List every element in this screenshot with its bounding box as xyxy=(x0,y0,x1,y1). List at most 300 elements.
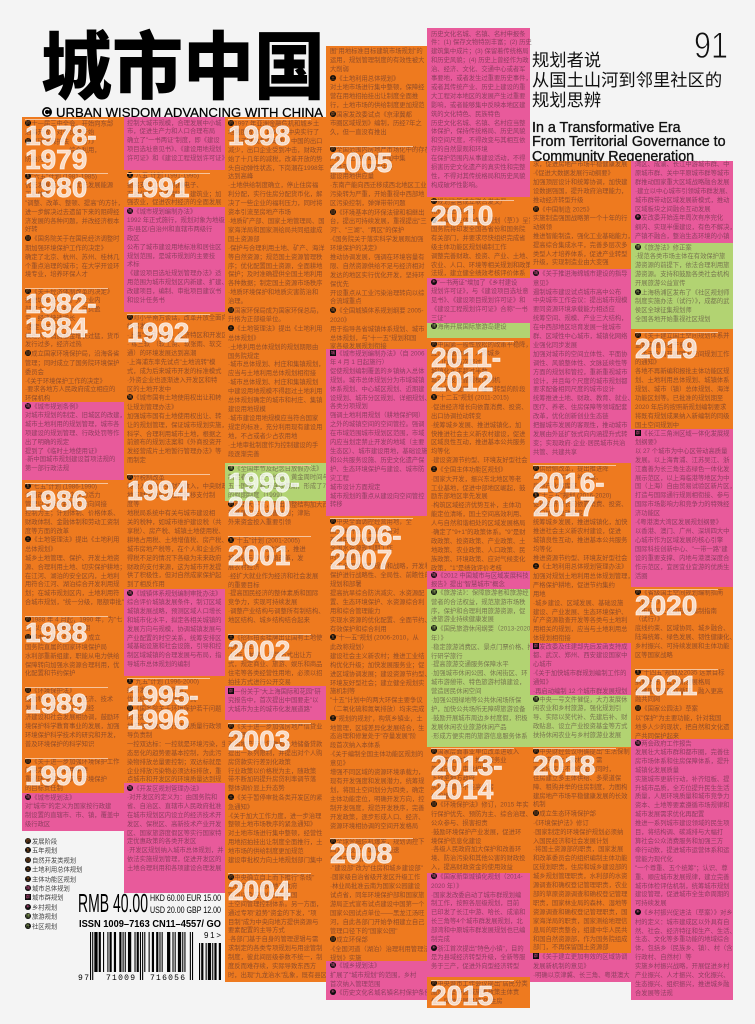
text: 2005 events: 2020》 xyxy=(330,317,350,324)
text: 1982-1984 events: 发行过多，经济过热 xyxy=(25,341,82,348)
text: 土地利用总体规划: 对土地市场进行集中整顿，保障经 xyxy=(330,84,424,91)
price: HKD EUR: HKD 60.00 EUR 15.00 xyxy=(150,893,221,904)
text: 一书两证: 确立了"一书两证"制度，即《建设 xyxy=(127,137,220,144)
text: 两会与乡村振兴促进法: 城市体检评估机制，统筹城市规划 xyxy=(635,882,729,890)
text: 2020 events: 《市级国土空间规划编制指南 xyxy=(635,608,717,614)
panel: 国家新型城镇化规划 xyxy=(427,873,530,977)
text: 两会与乡村振兴促进法: 建设管理，促进城市全生命周期的 xyxy=(635,891,729,898)
text: 2006-2007 events: 提高抗旱综合防洪减灾、水资源配 xyxy=(330,590,424,597)
text: 2016-2017 events: 体规划相衔接 xyxy=(533,635,571,642)
text: 2016-2017 events: 推进资源节约型、环境友好型社会 xyxy=(533,555,627,562)
text: 两会与乡村振兴促进法: 村的定义：城市建成区以外具有自 xyxy=(635,919,729,926)
text: 1990 events: 重视环境保护，实行环境保护 xyxy=(25,776,107,783)
text: 两会与乡村振兴促进法: 目，将结构调、碳减排与大幅打 xyxy=(635,829,723,836)
text: 2008 events: ·国家级自治省级开发区升级工作 xyxy=(330,874,420,881)
year label: 1996 xyxy=(127,704,189,735)
text: 海绵城市: 城 xyxy=(534,270,538,275)
panel: 旅游法 xyxy=(427,589,530,747)
text: 2002 events xyxy=(228,634,322,686)
text: 中央一号文件 xyxy=(533,696,631,741)
text: 2008 events: 国家公园试点单位——黑龙江汤旺 xyxy=(330,910,424,917)
text: 开发区规划管理办法: 在城市规划区内设立的经济技术开 xyxy=(127,812,221,819)
text: 2021 events xyxy=(635,669,733,741)
text: 2006-2007 events: 国土地开发，企业投资对 xyxy=(330,528,399,535)
legend: 主体功能区规划 xyxy=(32,876,76,883)
text: 大上海国际和花园 xyxy=(228,688,321,713)
text: 区域协调发展新机制 xyxy=(533,953,631,980)
legend: 主 xyxy=(26,876,30,881)
text: 2010 events: 国务院将印发全国各省份和国务院 xyxy=(431,226,525,233)
text: 区域协调发展新机制: 群 xyxy=(534,953,538,958)
text: 1998 events: 自 xyxy=(229,307,233,312)
year label: 1982- xyxy=(25,288,97,319)
legend: 发展阶段 xyxy=(32,838,57,846)
text: 一书三证: 《建设工程规划许可证》合称"一书 xyxy=(431,306,528,313)
text: 开发区规划管理办法: 《开发区规划管理办法》 xyxy=(133,785,203,792)
text: 两会与乡村振兴促进法: 城 xyxy=(636,740,640,744)
text: 城市规划编制办法: 城 xyxy=(128,208,132,212)
heading: English feature title xyxy=(532,120,726,165)
text: 2021 events: 五 xyxy=(636,669,640,674)
text: 2018 events: 源调查和确权登记管理职责，农业 xyxy=(533,882,627,889)
text: 2011-2012 events: 中国第一般性放松的政策平稳降， xyxy=(437,341,532,348)
text: 城乡规划法: 城 xyxy=(331,962,335,967)
text: 两会与乡村振兴促进法: 可持续发展 xyxy=(635,900,666,907)
text: 2001 events: 竞争力，实现可持续发展 xyxy=(228,599,297,606)
text: 土地利用总体规划: 运用，规划管理制度的有效性被大 xyxy=(330,57,424,64)
text: 历史文化名城: 治、经济、文化、交通中心或者军 xyxy=(431,66,525,73)
text: 2016-2017 events: 促进经济增长向依靠消费、投资、 xyxy=(533,501,627,508)
text: 2010 events: 级主体功能区规划编制工作 xyxy=(431,244,507,251)
text: 旅游法修正案与社区规划: 游资源的前提下，依法合理利用旅 xyxy=(635,262,729,269)
text: 两会与乡村振兴促进法: 产业振兴、人才振兴、文化振兴、 xyxy=(635,972,729,979)
text: 2003 events: 提出一系列限制，并提出对个人购 xyxy=(228,750,322,757)
text: 2016-2017 events: 阶 xyxy=(534,464,538,470)
text: 1992 events: 区的土地开发中 xyxy=(127,386,171,393)
text: 2013-2014 events: 入，提高财政资金的使用效益 xyxy=(431,864,513,871)
text: 2016-2017 events: 统筹城乡发展，推进城镇化，加快 xyxy=(533,519,627,526)
text: 1991 events: 强农业，促进农村经济的全面发展 xyxy=(127,199,221,206)
text: 2011-2012 events: "十二五"规划 (2011-2015) xyxy=(437,395,509,402)
text: 1986 events: 全面改革，增强企业的活力 xyxy=(25,492,101,499)
text: 2018 events: 住房建立多主体供给、多渠道保 xyxy=(533,775,621,782)
panel: 开发区规划管理办法 xyxy=(124,783,225,893)
text: 2005 events: 自 xyxy=(331,209,335,214)
text: 城市群与特色小镇: 乡 xyxy=(636,214,640,219)
text: 城市规划编制办法: 《城市规划编制办法》 xyxy=(133,208,196,215)
text: 1982-1984 events: 部权力，放开物价、自负盈 xyxy=(25,306,101,313)
text: 2008 events: 游局正式宣布试点建设中国第一个 xyxy=(330,901,424,908)
text: 2011-2012 events: 制改革为发展人，建设转型的阶段 xyxy=(431,386,525,393)
text: 1998 events: 总体规划》 xyxy=(228,335,259,342)
text: 1990 events: 自 xyxy=(26,758,30,763)
text: 2013-2014 events: 房地产调控不能高估房 xyxy=(431,784,494,791)
text: 2011-2012 events: 政策，"1"是绩效评价考核 xyxy=(431,565,502,572)
text: 海绵城市 xyxy=(533,270,631,458)
text: 2016-2017 events: 《土地利用总体规划管理办法》 xyxy=(539,564,627,571)
text: 一书三证: 三证" xyxy=(431,315,446,322)
text: 旅游法修正案与社区规划: 全国各地开始重视社区规划 xyxy=(635,316,711,323)
text: 城市群与特色小镇: 湾区、成渝、长江中游城市群、中 xyxy=(635,161,729,168)
text: 2018 events: 息局的职责整合，组建中华人民共 xyxy=(533,927,627,934)
text: 大数据与中国制造: 动纲领 xyxy=(533,224,552,231)
text: 城市群与特色小镇: 城市群带动区域发展新模式，推动 xyxy=(635,197,729,204)
year label: 1998 xyxy=(228,120,290,151)
text: 一书两证: 项目选址意见书》、《建设用地规划 xyxy=(127,146,221,153)
text: 1988 events xyxy=(25,616,122,677)
text: 2003 events: 整体调价显上升态势 xyxy=(228,785,285,792)
text: 1992 events: ·上海"浦东"开发，经济特区和开发区 xyxy=(127,332,228,339)
text: 1980 events: 期加强环境保护工作的决定》 xyxy=(25,245,107,252)
text: 2004 events: 中央确立自上而下推行"条线" xyxy=(234,874,314,881)
text: 城市规划法 xyxy=(25,794,119,828)
text: 2001 events: ·提高国民经济的整体素质和国际 xyxy=(228,590,318,597)
text: 2011-2012 events: 快推进社会主义新农村建设，促进 xyxy=(431,431,525,438)
panel: 国家中心城市 xyxy=(530,643,631,695)
year label xyxy=(127,680,199,735)
text: 2011-2012 events: ·建设资源节约型、环境友好型社会 xyxy=(431,457,528,464)
text: 城市规划编制办法: 市/县区/自治州和直辖市两级行 xyxy=(127,226,212,233)
text: 土地利用总体规划: 图"用地标准目标建筑市场规划"的 xyxy=(330,48,423,55)
text: 2011-2012 events: 阶 xyxy=(432,340,436,346)
text: 1994 events xyxy=(127,474,234,588)
text: 2013-2014 events: ·各级人民政府加大保护和改善环 xyxy=(431,846,521,853)
text: 城市规划条例: 城 xyxy=(26,402,30,408)
text: 1988 events: 保障转向加强水资源合理利用，优 xyxy=(25,662,119,669)
text: 两会与乡村振兴促进法: 推进一系列城市建设领域的民生项 xyxy=(635,820,729,827)
text: 2005 events: 推动协调发展，强调在环境容量有 xyxy=(330,254,424,261)
panel: 长三角与粤港澳 xyxy=(631,429,733,587)
text: 2013-2014 events: 境、防治污染和其他公害的财政投 xyxy=(431,855,525,862)
text: 旅游法修正案与社区规划: 侯区全球征集规划师 xyxy=(635,307,692,314)
text: 1992 events: 前颁布的规划法案和《外商投资开 xyxy=(127,439,221,446)
text: 1994 events: 将收入划分中央财政收入，中央财政对 xyxy=(127,483,234,490)
text: 城镇体系规划编制审批办法: 综合评价城镇发展条件，制订区域 xyxy=(127,599,221,606)
text: 2008 events: 试点省，同年环境保护部和国家旅 xyxy=(330,892,424,899)
text: 海绵城市: 统筹推进土地、财政、教育、就业、 xyxy=(533,395,634,402)
text: 城镇体系规划编制审批办法 xyxy=(127,590,222,668)
text: 长三角与粤港澳: 以 27 个城市为中心区带动高质量 xyxy=(635,448,727,455)
text: 1980 events: 好转 xyxy=(25,226,38,233)
legend: 五年规划 xyxy=(32,848,57,855)
text: 1998 events: 始了十几年的减税，改革开放的势 xyxy=(228,156,322,163)
text: 2008 events: ·《全国河道（湖泊）治理利用管理法 xyxy=(330,946,430,953)
text: 1991 events: 振兴支柱工业、机械电子、 xyxy=(127,182,203,189)
text: 城市规划编制办法: 1992 年正式施行，规划对象为地级 xyxy=(127,217,225,224)
text: 2018 events: 中央财经会议明确提出"生活保制 xyxy=(539,748,630,755)
text: 历史文化名城 xyxy=(431,30,532,189)
legend: 五 xyxy=(26,847,30,852)
text: 两会与乡村振兴促进法: 行政村、自然村）等 xyxy=(635,954,692,961)
text: 1986 events: 五 xyxy=(26,482,30,488)
text: 2005 events: 环境保护的决定》 xyxy=(330,245,380,252)
text: 两会与乡村振兴促进法: 算社会公众消费服务和加强三方 xyxy=(635,838,723,845)
text: 海南国际旅游岛: 海南开展国际旅游岛建设 xyxy=(437,324,507,331)
text: 一书三证: 见书》、《建设项目规划许可证》和 xyxy=(431,297,525,304)
legend: 群 xyxy=(26,894,30,899)
text: 2006-2007 events: 新增用地严格把控 xyxy=(330,536,380,544)
text: 城市规划编制办法 2006: 规划。城市总体规划分为市域城镇 xyxy=(330,377,424,384)
text: 中央一号文件: 扶持休闲农业与乡村旅游业发展 xyxy=(533,732,621,739)
text: 开发区规划管理办法: ·开发区规划纳入城市总体规划，并 xyxy=(127,847,224,854)
text: 历史文化名城: 历史文化名城、名镇、名村申报条 xyxy=(431,30,525,38)
text: 旅游法: 行研学旅行 xyxy=(431,653,462,660)
text: 2001 events: 的重要目标 xyxy=(228,582,259,589)
text: 国家中心城市: 群 xyxy=(534,643,538,648)
text: 城市规划编制办法 2006: 和公共服务设施、历史文化遗产保 xyxy=(330,457,424,464)
text: 2010 events: 农业、人口、环境等相关规划和政策 xyxy=(431,262,532,269)
text: 一书三证: 乡 xyxy=(432,279,436,284)
text: 城市规划编制办法: 《建设项目选址规划管理办法》适 xyxy=(127,270,221,277)
text: 城市群与特色小镇: 区域板块之间融合互动发展 xyxy=(635,206,711,213)
text: 2016-2017 events: 推进社会主义新农村建设，促进 xyxy=(533,528,621,535)
text: 1998 events: 国家环保局成为国家环保总局， xyxy=(234,308,322,315)
text: 城市规划编制办法 2006: 生态区）、城市建设用地，基础设施 xyxy=(330,448,428,455)
text: 长三角与粤港澳: 心城市作为区域发展的核心引擎 xyxy=(635,537,723,544)
text: 海绵城市: 调性、风貌整体性、文脉延续性等 xyxy=(533,360,627,367)
text: 2011-2012 events: 区域良性互动，推进基本公共服务 xyxy=(431,439,525,446)
text: 1986 events: 度等方面的改革 xyxy=(25,528,69,535)
text: 1994 events: 财政的支付来源，这为城市开发提 xyxy=(127,564,221,571)
text: 2005 events: 合流域重点 xyxy=(330,298,361,305)
text: 2008 events: 全球金融危机爆发，规划调控下 xyxy=(336,838,424,846)
text: 2001 events: ·经扩大就业作为经济和社会发展 xyxy=(228,573,318,580)
text: 2019 events xyxy=(635,332,733,431)
text: 开发区规划管理办法 xyxy=(127,784,224,872)
text: 2006-2007 events: 资源环境相协调的空间开发格局 xyxy=(330,822,418,830)
text: 1992 events: ·"练三软"（软工资、软张雨、软交 xyxy=(127,341,222,348)
text: 2011-2012 events: ·促进经济增长向依靠消费、投资、 xyxy=(431,404,528,411)
text: 2016-2017 events: 出口协调拉动转变 xyxy=(533,510,583,517)
text: 旅游法: 《旅游法》：保障旅游者和旅游经 xyxy=(437,590,529,597)
text: 1998 events: 决了一些企业的福利压力，同时将 xyxy=(228,200,322,207)
text: 长三角与粤港澳: 设的重要支撑、内地与港澳深度合 xyxy=(635,555,729,562)
text: 大数据与中国制造 xyxy=(533,161,631,268)
text: 2021 events: 《国家公园法》草案 xyxy=(641,706,698,713)
year label: 1988 xyxy=(25,617,87,648)
text: 两会与乡村振兴促进法: 重、顺应城市发展规律，建立完善 xyxy=(635,874,729,881)
text: 2005 events: 中体现，并且国民住房 xyxy=(330,164,393,171)
text: 历史文化名城: 和历史风貌；(4) 历史上曾经作为政 xyxy=(431,57,529,64)
text: 城市规划编制办法: 政区 xyxy=(127,235,140,242)
text: 海绵城市: 变；实现政府·企业·居民城市共治 xyxy=(533,440,625,447)
text: 2005 events: 《环境基本的环保法律和相继出 xyxy=(336,209,424,216)
text: 国家中心城市: ·《关于加快城市群规划编制工作的 xyxy=(533,670,626,677)
text: 旅游法修正案与社区规划: 游资源。支持和鼓励各类社会机构 xyxy=(635,271,729,278)
text: 2004 events: 官员以及在物化强化的国 xyxy=(228,892,297,899)
text: 2016-2017 events: ·城乡建设、区域发展、基础设施 xyxy=(533,600,623,607)
text: 国家新型城镇化规划: 城 xyxy=(432,873,436,878)
panel: 大数据与中国制造 xyxy=(530,161,631,269)
text: 2004 events: 制度，彼此间层级参数不统一，制 xyxy=(228,954,322,961)
text: 2011-2012 events: 工业基地，促进中部地区崛起，鼓 xyxy=(431,484,525,492)
text: 2018 events: 度要求建立长效机制，需 xyxy=(533,757,602,764)
text: 土地利用总体规划: 《土地利用总体规划》 xyxy=(336,75,399,82)
text: 1998 events: 资本引流至房地产市场 xyxy=(228,209,291,216)
text: 2000 events: 阶 xyxy=(229,501,233,506)
text: 大数据与中国制造: 升级，实现制造业由大变强 xyxy=(533,259,609,266)
text: 城市规划法: 制设置的直辖市、市、镇，覆盖中 xyxy=(25,812,119,819)
text: 1980 events: 五 xyxy=(26,172,30,178)
text: 城市群与特色小镇: 产镇不融合，整治生态环境的小镇 xyxy=(635,233,729,240)
text: 2013-2014 events: 行保护优先、预防为主、综合治理、 xyxy=(431,811,532,818)
text: 2003 events: ·《关于加大工作力度，进一步治理 xyxy=(228,813,321,820)
text: 2001 events: 城镇化与农业乡镇改革，发 xyxy=(228,555,304,562)
text: 1986 events: 划；在城市规划区内，土地利用符 xyxy=(25,590,119,597)
text: 城镇体系规划编制审批办法: 《城镇体系规划编制审批办法》 xyxy=(133,590,221,597)
text: 1982-1984 events xyxy=(25,288,119,402)
text: 两会与乡村振兴促进法: 实施城市更新行动，补齐短板、提 xyxy=(635,776,729,783)
text: 1992 events: 让的规划管理，保证城市规划实施， xyxy=(127,422,228,429)
text: 1998 events: 《土地管理法》提出《土地利用 xyxy=(234,326,322,333)
text: 城市规划编制办法 2006: 各类分项规划 xyxy=(330,403,368,410)
text: 城乡规划法 xyxy=(330,962,437,997)
year label: 2017 xyxy=(533,491,595,522)
text: 2015 events: 阶 xyxy=(432,980,436,984)
text: 1992 events xyxy=(127,314,228,464)
text: 1995-1996 events: 一控双达标：一控就是环境污染，生 xyxy=(127,741,228,748)
text: 1980 events: 自 xyxy=(26,235,30,240)
text: 旅游法修正案与社区规划: 《旅游法》修正案 xyxy=(641,244,692,251)
text: 2018 events: 入国民经济和社会发展计划 xyxy=(533,838,609,845)
text: 1986 events: 城乡土地管理、保护、开发土地资 xyxy=(25,555,119,562)
text: 1989 events: 自 xyxy=(26,687,30,692)
text: 城市规划编制办法 2006: 年 4 月 1 日起施行） xyxy=(330,359,388,366)
panel: 2006-2007 xyxy=(326,516,427,838)
text: 1988 events: 城市环保工作分开，成立 xyxy=(31,635,101,642)
text: 1998 events: 总体规划确定的城市和村庄、集镇 xyxy=(228,397,322,404)
legend: 城市总体规划 xyxy=(32,886,70,893)
text: 国家新型城镇化规划: 部湾和中原城市群发展规划也已编 xyxy=(431,927,525,934)
text: 2013-2014 events: 国家层面事业单位改革进收入 xyxy=(437,748,519,755)
text: 1989 events: 济建设和社会发展相协调，鼓励环 xyxy=(25,714,119,721)
text: 2018 events: ·国家制定的环境保护规划必须纳 xyxy=(533,829,623,836)
year label xyxy=(533,471,605,519)
text: 旅游法: 《国民旅游休闲纲要（2013-2020 xyxy=(437,626,530,633)
text: 城市规划编制办法 2006: 内应当划定禁止开发的地域（主要 xyxy=(330,439,424,446)
text: 城市规划编制办法: 术标 xyxy=(127,261,140,268)
panel: 1995-1996 xyxy=(124,676,225,783)
text: 2005 events: 开设重点从工业污染治理转向以综 xyxy=(330,290,424,296)
text: 2021 events: 构建国内国际双循环，融入更高 xyxy=(635,688,723,694)
text: 2006-2007 events: 制开发强度，规范开发秩序，完善 xyxy=(330,805,424,812)
panel: 1994 xyxy=(124,474,225,589)
text: 1998 events: 序；优化配置国土资源，全面耕地 xyxy=(228,262,322,270)
text: 2008 events: 河，自此各部门开始争相建立自己 xyxy=(330,919,424,926)
panel: 1982-1984 xyxy=(22,288,124,402)
year label: 1979 xyxy=(25,144,87,175)
text: 城市规划编制办法 2006: 在市域范围城市规划区范围，市域 xyxy=(330,430,424,437)
heading: Chinese feature title xyxy=(532,50,722,110)
text: 国家新型城镇化规划: 长三角等4个城市群发展规划，北 xyxy=(431,918,523,925)
text: 2005 events: 建设用地供应量 xyxy=(330,173,374,180)
text: 1994 events: 地税局系统中有关与城市建设相 xyxy=(127,510,215,517)
year label: 1989 xyxy=(25,688,87,719)
text: 大数据与中国制造: 类型人才培养体系，促进产业转型 xyxy=(533,251,627,258)
panel: 一书三证 xyxy=(427,278,530,323)
panel: 城市群与特色小镇 xyxy=(631,161,733,243)
text: 2004 events: 求制定的各类专项规划与用途管制 xyxy=(228,945,322,952)
text: 1986 events: "七五"计划 (1986-1990) xyxy=(31,483,97,490)
text: 2000 events: 部基建和生态改善计划；津贴 xyxy=(228,510,310,517)
text: 1986 events: 《土地管理法》提出《土地利用 xyxy=(31,537,119,544)
text: 1992 events: 城 xyxy=(128,394,132,399)
text: 城市群与特色小镇: 纲内、实现半僵建设，有色不解决， xyxy=(635,224,736,231)
text: 旅游法: 城市游憩带、特色旅游村镇建设， xyxy=(431,679,525,686)
text: 中央一号文件: 导、实际以奖代补、先建后补、财 xyxy=(533,714,627,721)
text: 2010 events: 阶 xyxy=(432,198,436,203)
text: 1998 events: 一揽子财政刺激政策，中国的出口 xyxy=(228,138,322,145)
text: 中央一号文件: 政贴息、设立产业投资基金等方式 xyxy=(533,723,627,730)
text: 城市规划编制办法 2006: 之外的城镇空间的空间管控。强调 xyxy=(330,421,424,428)
text: 2000 events: 外来资金投入重要引领 xyxy=(228,519,291,526)
text: 长三角与粤港澳: 国际科技创新中心、"一带一路"建 xyxy=(635,546,728,553)
year label: 2014 xyxy=(431,774,493,805)
text: 2005 events: 台，提出可持续发展，重视提出"三 xyxy=(330,218,427,225)
text: 2003 events: 带不断加码提升房贷利率调节落 xyxy=(228,776,316,783)
text: 2011-2012 events: 能定位清晰，国土空间高效利用、 xyxy=(431,511,525,518)
text: 1980 events: 工业体系 xyxy=(25,191,50,198)
legend: 城 xyxy=(26,885,30,890)
text: 2004 events: 时，出现"九龙治水"乱象，既有县区 xyxy=(228,972,327,979)
text: 2015 events: 中央城市工作会议提出"居民分类 xyxy=(437,980,528,987)
year label: 1980 xyxy=(25,172,87,203)
text: 1986 events: 财政体制、金融体制和劳动工资制 xyxy=(25,519,119,526)
text: 两会与乡村振兴促进法: 两会政府工作报告 xyxy=(641,740,692,747)
text: 1992 events: 邓小平南方谈话，改革开放全面向 xyxy=(133,314,228,321)
text: 两会与乡村振兴促进法: 体，包括乡（民族乡、镇）、村（含 xyxy=(635,945,733,952)
text: 两会与乡村振兴促进法: 乡 xyxy=(636,909,640,914)
heading: English feature title: From Territorial Governance to xyxy=(532,134,726,150)
panel: 中央一号文件 xyxy=(530,695,631,747)
legend: 乡村规划 xyxy=(32,904,57,911)
text: 中央一号文件: 旅 xyxy=(534,696,538,700)
legend: 城市群规划 xyxy=(32,895,63,902)
text: 1982-1984 events: 成立国家环境保护局，沿海各省 xyxy=(31,351,119,358)
text: 1982-1984 events: 推进城市改革，扩大企业内 xyxy=(25,297,101,304)
heading: Chinese feature title: 从国土山河到邻里社区的 xyxy=(532,70,722,90)
text: 2001 events: 五 xyxy=(229,536,233,542)
text: 城镇体系规划编制审批办法: 制区域城镇的合理发展与布局，指 xyxy=(127,652,221,659)
text: 区域协调发展新机制: 《关于建立更加有效的区域协调 xyxy=(539,954,627,961)
panel: 2010 xyxy=(427,197,530,278)
text: 2004 events: 治理方向，相对地方政府 xyxy=(228,883,297,890)
text: 城镇体系规划编制审批办法: 导城市总体规划的编制 xyxy=(127,661,190,668)
text: 旅游法: 序，保护和合理利用旅游资源，促 xyxy=(431,608,525,614)
text: 1998 events: 各种数据；制定国土资源市场秩序 xyxy=(228,280,322,287)
issue add-on label: 91> xyxy=(204,931,221,940)
text: 城市规划编制办法 2006: 强调土地利用规划（耕地保护网） xyxy=(330,412,424,419)
text: 2019 events: 划、土地利用总体规划、城镇体系 xyxy=(635,377,729,384)
text: 1994 events: 供了积极性，但对自然成家保护起 xyxy=(127,572,221,579)
text: 1986 events: 控制为主；计划体制、价格体系、 xyxy=(25,510,119,517)
text: 1995-1996 events: 企业排放污染物必须达标排放，重 xyxy=(127,768,221,775)
text: 2018 events xyxy=(533,748,631,953)
panel: 2003 xyxy=(225,720,326,873)
text: 2011-2012 events: 城市开发依靠规模体制机 xyxy=(431,377,500,384)
text: 城镇体系规划编制审批办法: 域基础设施和社会设施，引导和控 xyxy=(127,643,221,650)
text: 旅游法: 年）》 xyxy=(431,635,447,642)
text: 2018 events: 资源调查和确权登记管理职责，国 xyxy=(533,909,627,916)
panel: 2020 xyxy=(631,587,733,669)
text: 2000 events: 西部大开发，提出调整结构加大西 xyxy=(234,502,329,508)
text: 城市规划编制办法 2006: 城市规划的重点从建设向空间管控 xyxy=(330,492,424,500)
text: 1989 events: 《环境保护法》 xyxy=(31,688,75,694)
text: 2018 events: 城乡规划管理职责，水利部的水资 xyxy=(533,873,627,880)
year label: 2018 xyxy=(533,750,595,781)
text: 长三角与粤港澳 xyxy=(635,430,733,581)
text: 2011-2012 events: ·国家大开发，振兴东北地区等老 xyxy=(431,476,521,483)
